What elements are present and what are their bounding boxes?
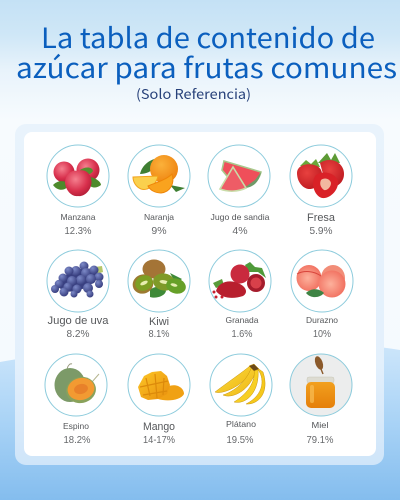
icon: pomegranate [212,262,266,298]
label: Kiwi [149,316,169,328]
item: Granada [209,250,271,340]
value: 1.6% [232,328,252,340]
icon: peaches [296,265,346,298]
icon: mango [138,371,184,400]
value: 79.1% [306,434,334,446]
value: 12.3% [64,225,92,237]
label: Durazno [306,315,338,325]
label: Jugo de uva [48,315,109,327]
value: 18.2% [64,434,90,446]
item: Plátano [210,354,272,446]
value: 5.9% [310,225,332,237]
value: 9% [151,225,167,237]
label: Espino [63,421,89,431]
item: Mango [128,354,190,446]
item: Fresa [290,145,352,237]
value: 14-17% [143,434,175,446]
value: 4% [232,225,248,237]
item: Jugo de sandia [208,145,270,237]
subtitle: (Solo Referencia) [136,83,251,103]
item: Durazno [291,250,353,340]
value: 10% [313,328,331,340]
item: Kiwi [128,250,190,340]
icon: kiwis [129,260,188,298]
icon: apples [53,158,101,196]
title: azúcar para frutas comunes [16,47,397,87]
icon: honey jar [306,355,335,408]
label: Manzana [60,212,96,222]
panel: fruit table [15,124,384,465]
label: Plátano [226,419,256,429]
icon: melon [54,364,99,406]
item: Miel [290,354,352,446]
icon: oranges [133,155,185,193]
label: Miel [312,420,329,430]
title: La tabla de contenido de [41,17,375,57]
icon: grapes [51,262,104,298]
label: Fresa [307,212,336,224]
title [16,17,397,87]
item: Naranja [128,145,190,237]
icon: watermelon [220,161,261,191]
item: Jugo de uva [47,250,109,340]
label: Granada [226,315,259,325]
item: Manzana [47,145,109,237]
value: 8.2% [66,328,90,340]
icon: strawberries [297,153,344,198]
value: 8.1% [148,328,170,340]
icon: bananas [215,364,265,404]
value: 19.5% [226,434,254,446]
item: Espino [45,354,107,446]
label: Naranja [144,212,174,222]
label: Jugo de sandia [210,212,270,222]
label: Mango [143,421,175,433]
